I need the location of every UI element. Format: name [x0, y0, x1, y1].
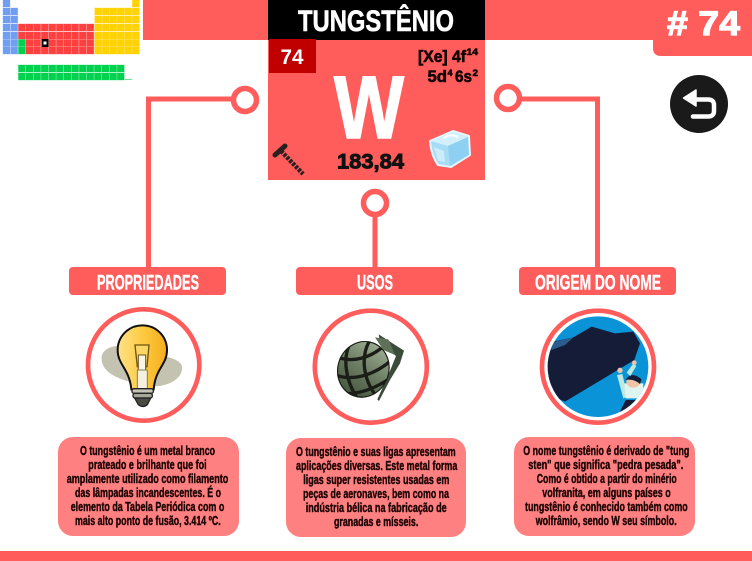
title bar: TUNGSTÊNIO: [298, 4, 454, 38]
badge: number 74: [653, 0, 752, 56]
icon: screw: [275, 146, 303, 174]
text block: usos: ligas super resistentes usadas em: [303, 473, 449, 487]
electron configuration: 14: [466, 47, 478, 57]
text block: usos: O tungstênio e suas ligas apresentam: [296, 445, 456, 459]
electron configuration: 2: [472, 68, 478, 78]
text block: usos: [286, 438, 466, 537]
icon: grenade: [315, 311, 427, 423]
text block: usos: aplicações diversas. Este metal forma: [296, 459, 458, 473]
heading: usos: USOS: [357, 272, 393, 294]
text block: origem do nome: volfranita, em alguns países o: [542, 486, 671, 500]
atomic mass: 183,84: [337, 150, 404, 174]
element symbol: W: [334, 57, 404, 157]
text block: propriedades: das lâmpadas incandescentes. É o: [75, 485, 221, 500]
icon: ice cube: [430, 131, 470, 167]
text block: propriedades: amplamente utilizado como filamento: [67, 472, 229, 486]
electron configuration: 4: [448, 68, 452, 78]
connector: left: [148, 88, 256, 267]
badge: number 74: # 74: [667, 5, 740, 43]
text block: origem do nome: Como é obtido a partir do minério: [537, 472, 677, 486]
electron configuration: [Xe] 4f: [418, 47, 466, 66]
text block: propriedades: mais alto ponto de fusão, 3.414 ºC.: [75, 514, 221, 528]
text block: origem do nome: tungstênio é conhecido também como: [525, 500, 688, 514]
heading: origem do nome: ORIGEM DO NOME: [535, 272, 661, 294]
text block: usos: indústria bélica na fabricação de: [306, 501, 447, 515]
heading: usos: [296, 267, 453, 295]
text block: usos: peças de aeronaves, bem como na: [303, 487, 450, 501]
footer bar: [0, 551, 752, 561]
text block: origem do nome: [514, 437, 695, 536]
text block: origem do nome: wolfrâmio, sendo W seu símbolo.: [535, 514, 677, 528]
icon: light bulb: [88, 309, 199, 421]
heading: propriedades: PROPRIEDADES: [97, 272, 199, 294]
connector: middle: [364, 192, 386, 267]
connector: right: [496, 86, 598, 267]
heading: propriedades: [69, 267, 226, 295]
electron configuration: 5d: [428, 67, 447, 86]
title bar: [268, 0, 485, 40]
element card: [268, 39, 485, 180]
electron configuration: 6s: [455, 67, 472, 86]
icon: back button: [670, 75, 728, 133]
text block: propriedades: prateado e brilhante que foi: [88, 458, 207, 472]
text block: propriedades: O tungstênio é um metal branco: [80, 444, 215, 458]
mini periodic table: [3, 0, 139, 80]
text block: propriedades: elemento da Tabela Periódica com o: [71, 500, 225, 514]
header band: [143, 0, 752, 40]
text block: propriedades: [58, 437, 239, 536]
heading: origem do nome: [519, 267, 676, 295]
icon: climber pushing a rock: [542, 311, 654, 423]
text block: usos: granadas e mísseis.: [334, 515, 418, 529]
atomic number: 74: [280, 46, 304, 69]
electron configuration: [418, 47, 478, 86]
atomic number: [269, 39, 316, 73]
text block: origem do nome: sten" que significa "pedra pesada".: [528, 458, 683, 472]
text block: origem do nome: O nome tungstênio é derivado de "tung: [523, 444, 689, 458]
